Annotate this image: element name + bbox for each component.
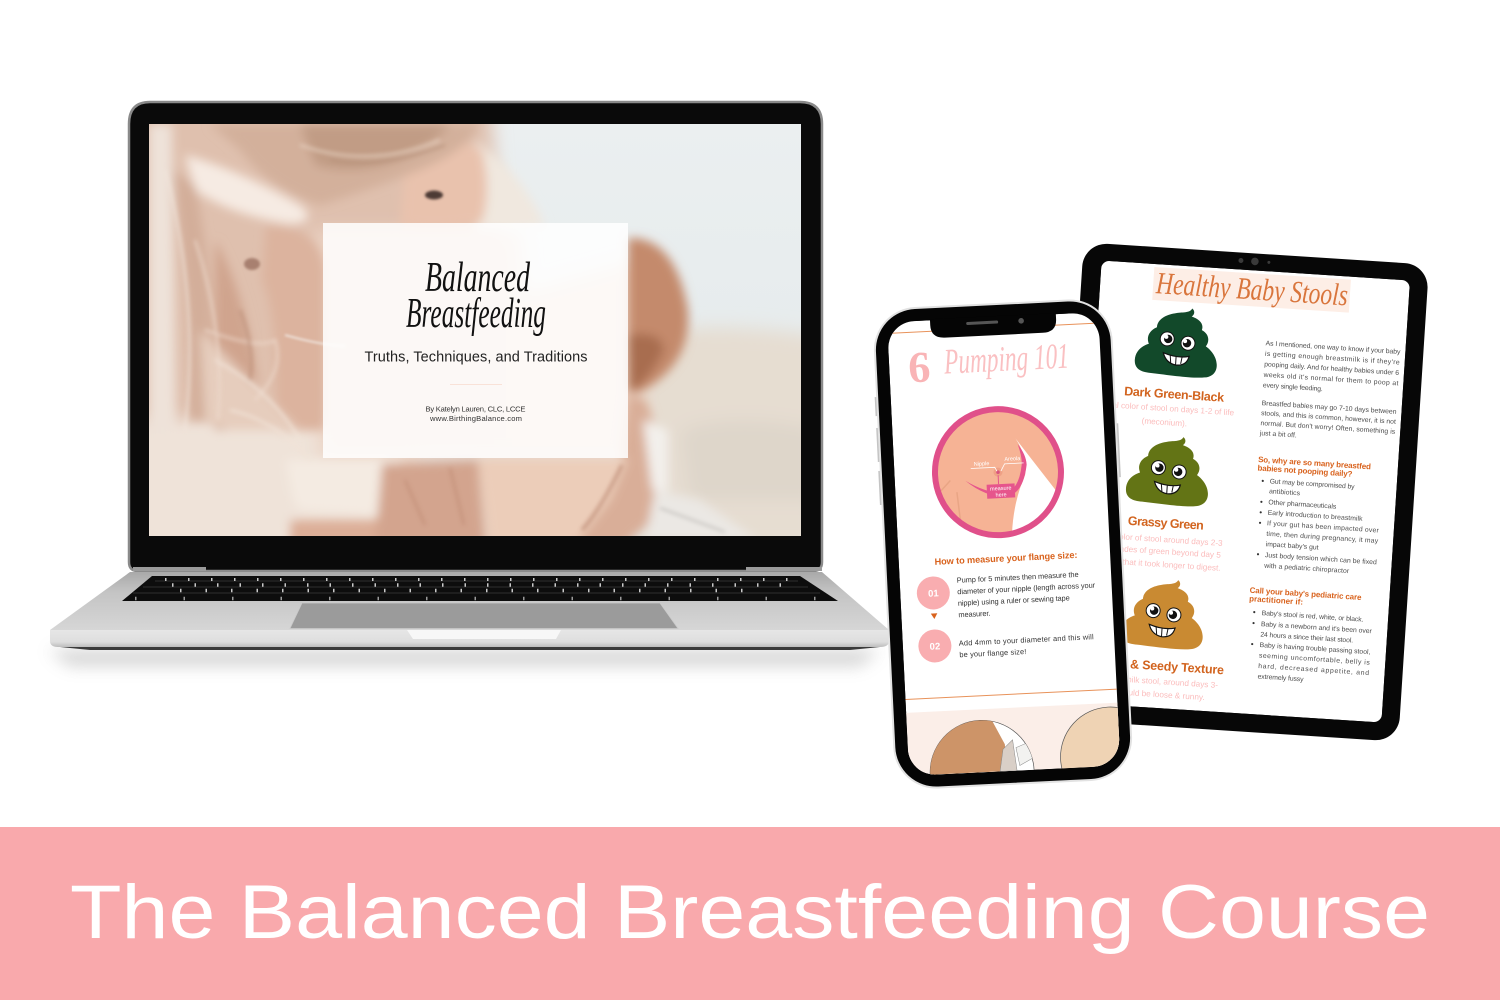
- intro paragraphs: pooping daily. And for healthy babies under 6: [1264, 361, 1399, 377]
- bullet list: reasons: Other pharmaceuticals: [1268, 499, 1337, 511]
- chapter title: 6 Pumping 101: 6: [907, 342, 931, 392]
- step 01 text: measurer.: [958, 609, 991, 619]
- cover divider: [450, 384, 502, 385]
- heading: why not pooping daily: [1258, 456, 1371, 478]
- phone screen: [888, 313, 1120, 775]
- heading: why not pooping daily: So, why are so many breastfed: [1258, 455, 1371, 471]
- bullet list: reasons: [1256, 478, 1382, 577]
- cover script title: Breastfeeding: [406, 291, 546, 337]
- step 01 badge: 01: [928, 588, 940, 600]
- step 02 badge: [918, 629, 952, 663]
- step 02 text: Add 4mm to your diameter and this will: [959, 632, 1094, 648]
- breast measuring diagram: Nipple: [974, 461, 990, 468]
- laptop base deck: [50, 572, 889, 630]
- tablet cameras: [1238, 257, 1271, 266]
- phone speaker: [966, 320, 998, 325]
- stool label: seedy texture: & Seedy Texture: [1130, 657, 1224, 677]
- intro paragraphs: [1259, 340, 1401, 446]
- intro paragraphs: weeks old it's normal for them to poop at: [1262, 372, 1399, 387]
- step 02 text: [959, 632, 1095, 659]
- trackpad: [290, 603, 678, 628]
- stool label: seedy texture: ould be loose & runny.: [1124, 688, 1205, 702]
- phone: [874, 300, 1132, 788]
- laptop: [48, 100, 889, 666]
- phone body: [873, 298, 1133, 790]
- stool label: seedy texture: [1129, 660, 1224, 702]
- laptop front lip: [50, 630, 889, 647]
- laptop latch: [407, 630, 561, 639]
- bullet list: reasons: with a pediatric chiropractor: [1263, 563, 1350, 575]
- top rule: [888, 323, 1099, 334]
- laptop lid: [129, 102, 822, 571]
- step 01 text: diameter of your nipple (length across your: [957, 581, 1096, 596]
- bullet list: when to call: 24 hours a since their last stool.: [1260, 632, 1353, 645]
- laptop hinges: [133, 567, 822, 571]
- cover card: [323, 223, 628, 458]
- banner: [0, 827, 1500, 1000]
- icon: mustard stool: [1126, 580, 1203, 650]
- bullet list: reasons: If your gut has been impacted over: [1267, 520, 1380, 535]
- breast measuring diagram: measure: [990, 486, 1012, 493]
- step 01 text: [957, 572, 1095, 618]
- bullet list: reasons: Early introduction to breastmilk: [1267, 510, 1363, 523]
- intro paragraphs: stools, and this is common, however, it is not: [1261, 410, 1396, 426]
- stool label: dark green-black: [1116, 386, 1234, 428]
- bullet list: reasons: Gut may be compromised by: [1269, 478, 1355, 491]
- stool label: grassy green: [1122, 516, 1222, 572]
- chapter title: 6 Pumping 101: Pumping 101: [942, 336, 1070, 382]
- intro paragraphs: normal. But don't worry! Often, something is: [1260, 420, 1396, 436]
- bullet list: when to call: Baby is having trouble passing stool,: [1259, 642, 1371, 656]
- tablet body: [1053, 242, 1429, 742]
- stool label: grassy green: color of stool around days 2-3: [1115, 532, 1223, 548]
- heading: why not pooping daily: babies not pooping daily?: [1257, 464, 1353, 479]
- step 02 badge: 02: [929, 641, 940, 653]
- breast measuring diagram: [932, 406, 1064, 538]
- next page preview: [906, 702, 1120, 775]
- arrow: step 1 to step 2: [931, 613, 938, 619]
- cover subtitle: Truths, Techniques, and Traditions: [364, 350, 588, 366]
- bullet list: reasons: impact baby's gut: [1265, 541, 1319, 552]
- phone camera: [1018, 318, 1024, 324]
- step 01 text: nipple) using a ruler or sewing tape: [958, 593, 1070, 608]
- step 02 text: be your flange size!: [959, 647, 1026, 659]
- title: Healthy Baby Stools: Healthy Baby Stools: [1154, 265, 1349, 312]
- laptop shadow: [48, 650, 880, 666]
- breast measuring diagram: Areola: [1004, 456, 1021, 463]
- bullet list: when to call: Baby is a newborn and it's been over: [1261, 621, 1373, 635]
- cover author: [426, 404, 526, 423]
- step 01 text: Pump for 5 minutes then measure the: [956, 570, 1079, 585]
- bullet list: when to call: Baby's stool is red, white, or black.: [1261, 610, 1364, 624]
- stool label: dark green-black: Dark Green-Black: [1124, 384, 1225, 405]
- icon: dark green stool: [1134, 308, 1217, 378]
- phone notch: [930, 313, 1057, 338]
- breast measuring diagram: here: [995, 492, 1007, 499]
- bullet list: reasons: Just body tension which can be fixed: [1265, 552, 1377, 566]
- bullet list: when to call: [1249, 610, 1373, 688]
- intro paragraphs: Breastfed babies may go 7-10 days between: [1262, 400, 1397, 416]
- intro paragraphs: every single feeding.: [1263, 382, 1323, 393]
- intro paragraphs: is getting enough breastmilk is if they're: [1265, 351, 1400, 366]
- intro paragraphs: just a bit off.: [1259, 430, 1297, 439]
- stool label: grassy green: that it took longer to digest.: [1122, 558, 1221, 573]
- heading: call your practitioner: practitioner if:: [1249, 594, 1303, 607]
- intro paragraphs: As I mentioned, one way to know if your baby: [1265, 340, 1401, 356]
- heading: how to measure: How to measure your flange size:: [934, 550, 1078, 567]
- step 01 badge: [916, 576, 951, 610]
- bullet list: when to call: hard, decreased appetite, and: [1258, 663, 1369, 677]
- chapter title: 6 Pumping 101: [910, 344, 1067, 382]
- stool label: grassy green: hades of green beyond day 5: [1115, 544, 1222, 560]
- keyboard: [122, 576, 838, 601]
- icon: grassy green stool: [1126, 437, 1208, 506]
- banner title: The Balanced Breastfeeding Course: [70, 870, 1430, 955]
- stool label: grassy green: Grassy Green: [1127, 514, 1204, 533]
- stool label: dark green-black: al color of stool on days 1-2 of life: [1112, 401, 1235, 417]
- cover author: By Katelyn Lauren, CLC, LCCE: [426, 404, 526, 414]
- laptop underside: [60, 647, 880, 650]
- tablet: [1053, 242, 1429, 742]
- bullet list: when to call: extremely fussy: [1257, 673, 1304, 683]
- bullet list: reasons: antibiotics: [1269, 488, 1301, 497]
- stool label: seedy texture: milk stool, around days 3-: [1125, 675, 1219, 690]
- bullet list: when to call: seeming uncomfortable, belly is: [1259, 653, 1371, 667]
- tablet screen: [1073, 261, 1410, 723]
- stool label: dark green-black: (meconium).: [1141, 416, 1187, 428]
- bullet list: reasons: time, then during pregnancy, it may: [1266, 531, 1379, 545]
- cover script title: [406, 255, 546, 337]
- cover author: www.BirthingBalance.com: [429, 414, 522, 423]
- cover script title: Balanced: [425, 255, 531, 301]
- phone side buttons: [875, 385, 1122, 505]
- laptop screen photo: mother nursing baby: [149, 124, 801, 536]
- heading: call your practitioner: Call your baby's pediatric care: [1249, 586, 1362, 602]
- lower rule: [905, 689, 1117, 700]
